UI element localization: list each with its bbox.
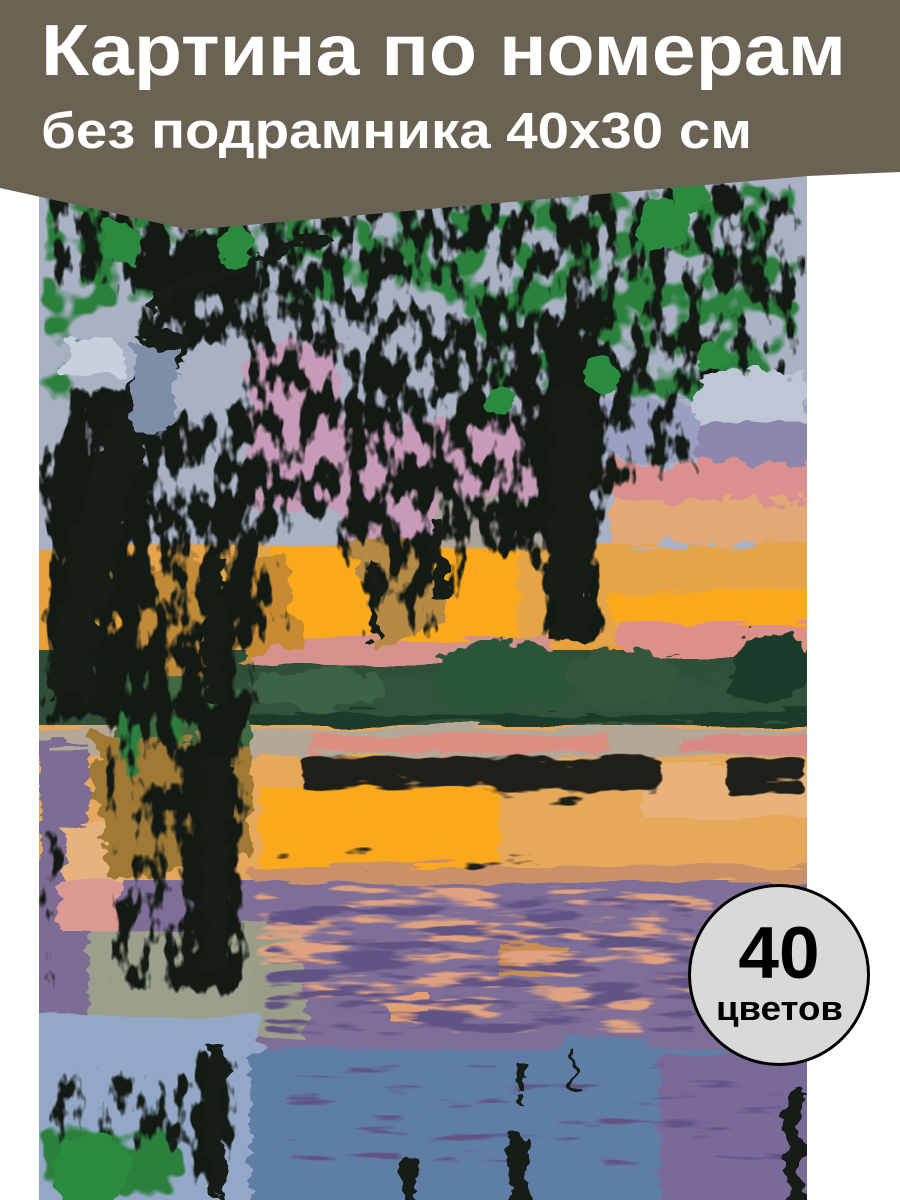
bright green accent leaves bbox=[52, 172, 725, 1200]
far tree line bbox=[240, 632, 820, 718]
warm undergrowth behind left tree bbox=[90, 535, 450, 880]
water ripples: light bbox=[250, 880, 720, 1040]
title: Картина по номерам bbox=[41, 11, 846, 91]
water bbox=[30, 727, 830, 1200]
water ripples: purple bbox=[260, 890, 800, 1180]
water line bbox=[250, 713, 820, 723]
grey-blue bark highlight bbox=[65, 340, 805, 425]
header banner bbox=[0, 0, 900, 230]
painting: lake at sunset under trees bbox=[30, 170, 830, 1200]
sky colour bands bbox=[90, 340, 820, 555]
foreground reeds bbox=[205, 1045, 802, 1200]
dark reflection on water bbox=[270, 755, 805, 875]
badge: 40 colours bbox=[690, 886, 868, 1064]
badge number: 40 bbox=[738, 913, 820, 994]
green leaves under shadow bbox=[39, 180, 807, 1200]
subtitle: без подрамника 40х30 см bbox=[41, 102, 752, 159]
solid tree trunks and branches bbox=[70, 235, 572, 970]
sunset glow band bbox=[120, 545, 820, 664]
badge label: цветов bbox=[716, 990, 843, 1028]
solid underpainting bbox=[39, 176, 807, 1058]
dark foliage and hanging branches bbox=[39, 175, 807, 1200]
